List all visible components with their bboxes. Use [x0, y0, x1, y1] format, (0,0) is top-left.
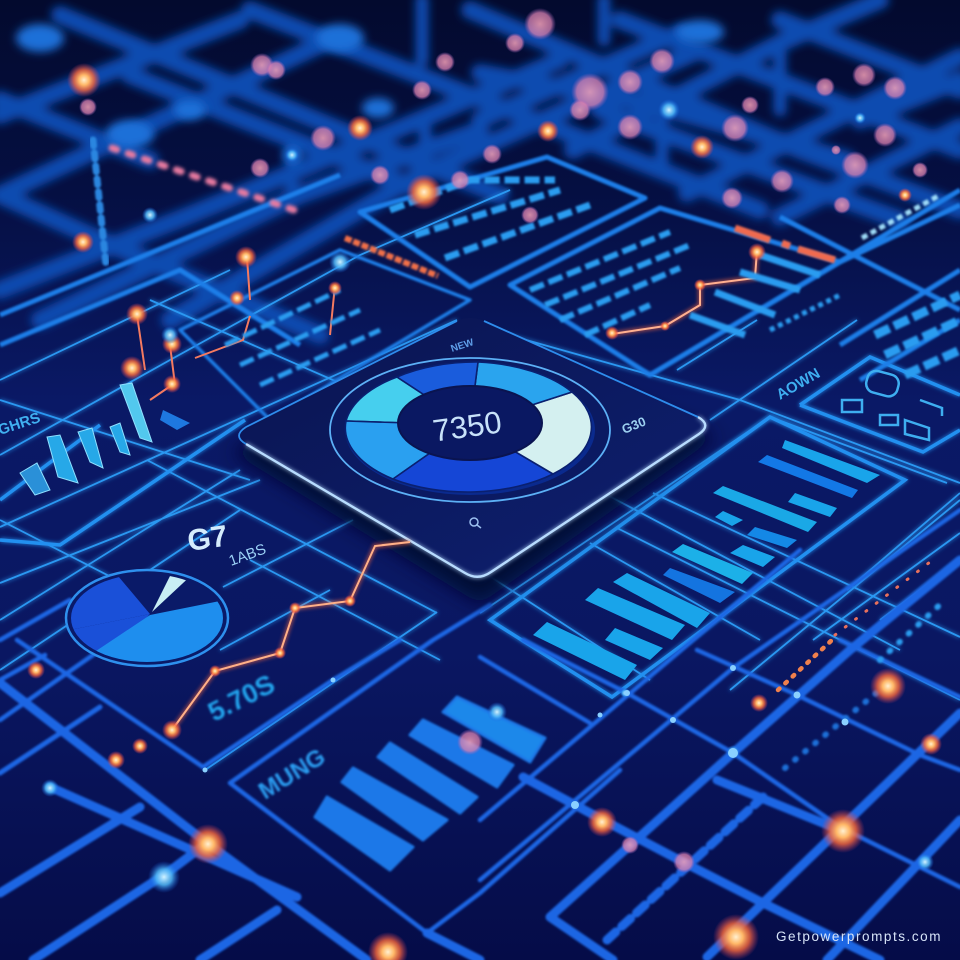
lower thick grid [0, 510, 960, 960]
bar chart: lower right [533, 440, 880, 680]
line chart: main orange [172, 542, 410, 730]
label strip: orange [345, 238, 438, 276]
blurred top grid bands [0, 0, 960, 335]
donut gauge [330, 358, 610, 502]
small grid node dots [202, 665, 848, 809]
top band nodes [16, 20, 724, 163]
dash row top right [862, 195, 940, 238]
label strip: top right orange [735, 228, 835, 260]
upper panel frames [0, 157, 960, 420]
icon panel right [774, 365, 942, 440]
line chart: upper left [137, 258, 335, 400]
heading: G7: G7 [185, 520, 230, 558]
panel label: G30 [620, 414, 648, 437]
panel: upper data rows [225, 180, 960, 385]
glow points: pink [79, 8, 928, 873]
value label: 5.70S [203, 669, 280, 727]
label: AOWN [774, 365, 823, 403]
vertical dotted stem [93, 140, 106, 265]
mid thin grid [0, 190, 960, 770]
bottom panel caption: MUNG [254, 743, 330, 805]
glow points: blue [41, 99, 934, 893]
dotted orange trace [778, 562, 930, 690]
central dashboard panel [232, 318, 716, 604]
sublabel: 1ABS [227, 541, 268, 570]
heading: G7 [185, 520, 268, 570]
line chart: top right [612, 250, 757, 334]
bar chart: bottom centre [315, 697, 545, 870]
pie chart [60, 570, 235, 670]
gauge value: 7350 [431, 404, 504, 449]
watermark: Getpowerprompts.com [776, 929, 942, 944]
panel icon [470, 518, 481, 528]
bars: left cluster [20, 383, 190, 495]
panel top label: NEW [450, 337, 476, 355]
pink dotted trace upper left [112, 148, 300, 212]
dashed blue traces [785, 600, 945, 768]
